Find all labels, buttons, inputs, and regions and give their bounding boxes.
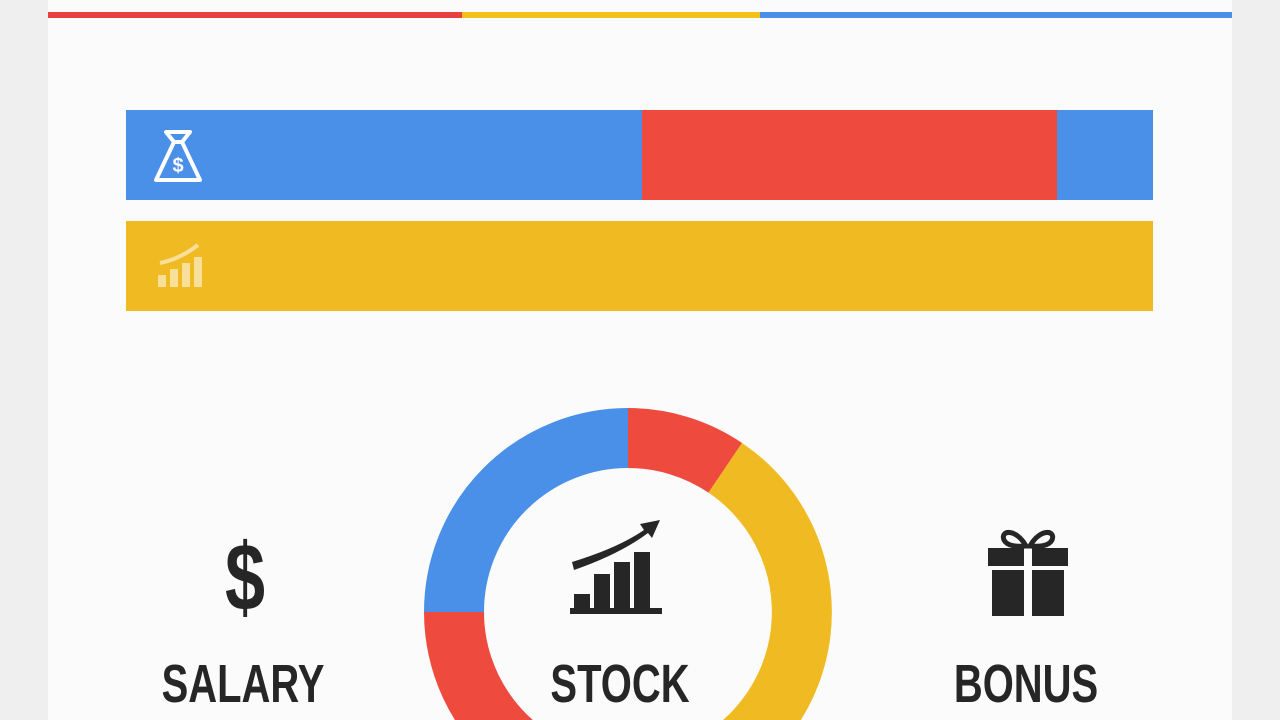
icon: gift	[988, 530, 1068, 616]
icon: money bag	[154, 130, 202, 182]
icon: growth chart	[158, 244, 202, 287]
icon: dollar: $	[225, 524, 265, 631]
label: stock: STOCK	[550, 654, 690, 714]
bar: stock	[126, 221, 1153, 311]
icon: stock chart	[570, 520, 662, 614]
bar: salary split	[126, 110, 1153, 200]
label: bonus: BONUS	[954, 654, 1098, 714]
icon: money bag: $	[172, 155, 184, 177]
top stripe	[48, 12, 1232, 18]
label: salary: SALARY	[162, 654, 324, 714]
